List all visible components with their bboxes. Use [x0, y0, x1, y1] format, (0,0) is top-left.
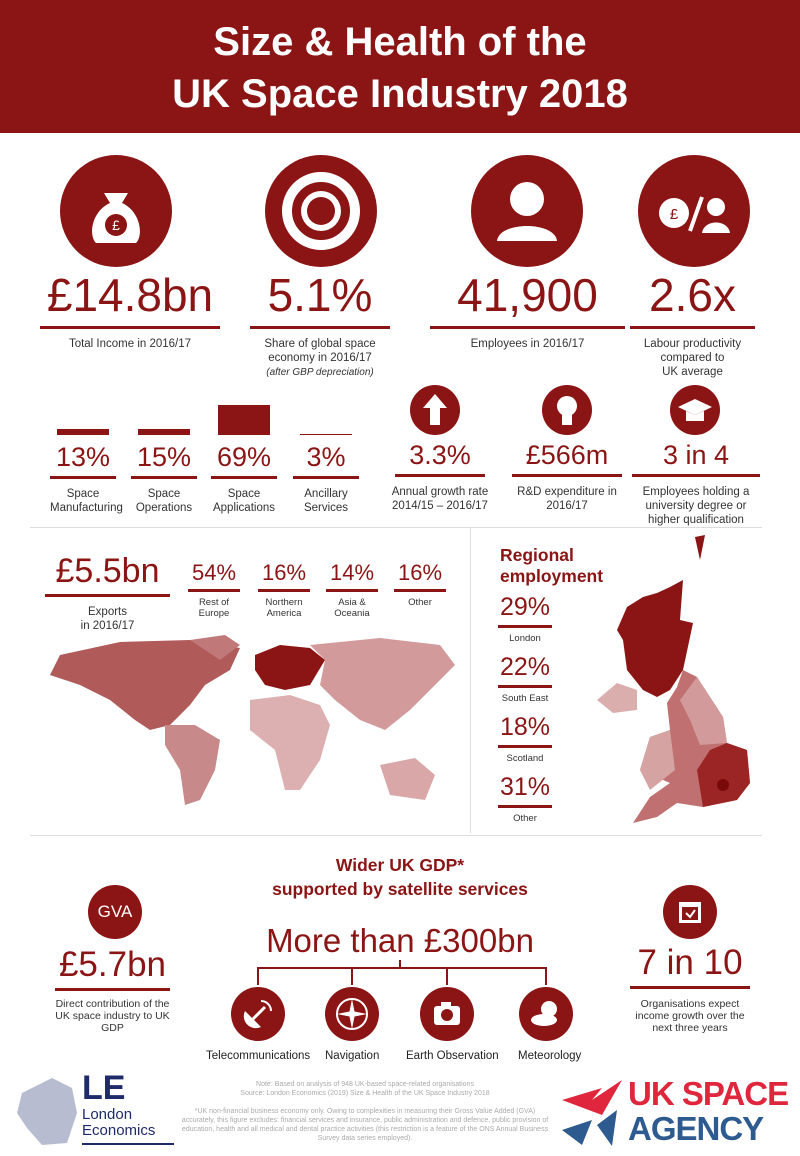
icon: compass: [325, 987, 379, 1041]
stat: total income: £14.8bn: [47, 269, 213, 321]
stat: GVA: [55, 945, 170, 1034]
logo: London Economics: London: [82, 1106, 132, 1123]
icon: weather: [519, 987, 573, 1041]
logo: UK Space Agency: AGENCY: [628, 1110, 763, 1147]
bar chart: segments: 15%: [137, 442, 191, 472]
stat: GVA: £5.7bn: [59, 945, 166, 984]
icon: up arrow: [410, 385, 460, 435]
stat: exports: £5.5bn: [56, 552, 160, 590]
stat: 7 in 10: [630, 943, 750, 1034]
icon: mortarboard: [670, 385, 720, 435]
bar chart: segments: 13%: [56, 442, 110, 472]
stat: exports: in 2016/17: [81, 620, 134, 632]
logo: London Economics: LE: [82, 1069, 125, 1107]
regional stats: Other: [513, 813, 537, 824]
icon: GVA: GVA: [98, 902, 132, 921]
stat: R&D: £566m: [526, 440, 608, 470]
icon: money bag: [60, 155, 172, 267]
stat: degree: [632, 440, 760, 526]
stat: 7 in 10: 7 in 10: [637, 943, 743, 982]
stat: degree: 3 in 4: [663, 440, 729, 470]
stat: share: [250, 269, 390, 378]
bar chart: segments: [50, 405, 359, 514]
regional stats: 18%: [500, 713, 550, 741]
stat: employees: 41,900: [457, 269, 598, 321]
bar chart: segments: Space Applications: [213, 488, 275, 514]
header banner: UK Space Industry 2018: [172, 72, 628, 116]
heading: regional employment: employment: [500, 566, 603, 586]
logo: London Economics: [17, 1069, 174, 1145]
labels: satellite services: Earth Observation: [406, 1050, 499, 1062]
stat: total income: Total Income in 2016/17: [69, 338, 191, 350]
stat: productivity: 2.6x: [649, 269, 736, 321]
regional stats: 29%: [500, 593, 550, 621]
export destinations: 16%: [398, 560, 442, 585]
stat: growth: Annual growth rate: [392, 486, 488, 498]
footnote: [182, 1080, 548, 1142]
export destinations: Other: [408, 597, 432, 608]
export destinations: 14%: [330, 560, 374, 585]
regional stats: 31%: [500, 773, 550, 801]
regional stats: Scotland: [506, 753, 543, 764]
stat: exports: Exports: [88, 606, 127, 618]
header banner: [0, 0, 800, 133]
icon: bulb: [542, 385, 592, 435]
export destinations: 54%: [192, 560, 236, 585]
stat: share: Share of global space economy in 2016/17: [264, 338, 376, 364]
logo: UK Space Agency: [562, 1075, 788, 1147]
bar chart: segments: Space Manufacturing: [50, 488, 123, 514]
logo: London Economics: Economics: [82, 1122, 155, 1139]
icon: calendar: [663, 885, 717, 939]
labels: satellite services: Telecommunications: [206, 1050, 310, 1062]
export destinations: 16%: [262, 560, 306, 585]
icon: money bag: £: [112, 217, 120, 233]
stat: productivity: UK average: [662, 366, 723, 378]
stat: R&D: R&D expenditure in 2016/17: [517, 486, 617, 512]
bar chart: segments: Space Operations: [136, 488, 192, 514]
stat: exports: [45, 552, 170, 632]
bar chart: segments: Ancillary Services: [304, 488, 348, 514]
heading: wider GDP: Wider UK GDP*: [336, 855, 464, 875]
footnote: *UK non-financial business economy only. Owing to complexities in measuring their Gross Value Added (GVA) accurately, this figure excludes: financial services and insurance, public administration and defence, public provision of education, health and all medical and dental practice activities (this restriction is a feature of the ONS Annual Business Survey data series employed).: [182, 1108, 548, 1142]
icon: donut: [265, 155, 377, 267]
labels: satellite services: [206, 1050, 582, 1062]
heading: wider GDP: [272, 855, 528, 899]
labels: satellite services: Navigation: [325, 1050, 379, 1062]
stat: degree: Employees holding a university degree or higher qualification: [643, 486, 749, 526]
stat: productivity: Labour productivity compared to: [644, 338, 741, 364]
icon: money per person: [638, 155, 750, 267]
stat: productivity: [630, 269, 755, 378]
icon: money per person: £: [670, 206, 679, 223]
header banner: Size & Health of the: [213, 20, 587, 64]
export destinations: Asia & Oceania: [334, 597, 370, 619]
logo: UK Space Agency: UK SPACE: [628, 1075, 788, 1112]
stat: share: 5.1%: [268, 269, 372, 321]
stat: 300bn: More than £300bn: [266, 922, 534, 959]
bar chart: segments: 69%: [217, 442, 271, 472]
footnote: Source: London Economics (2019) Size & Health of the UK Space Industry 2018: [240, 1090, 490, 1097]
stat: growth: 3.3%: [409, 440, 471, 470]
stat: R&D: [512, 440, 622, 512]
heading: wider GDP: supported by satellite services: [272, 879, 528, 899]
icon: camera: [420, 987, 474, 1041]
icon: GVA: [88, 885, 142, 939]
stat: employees: Employees in 2016/17: [471, 338, 584, 350]
stat: GVA: Direct contribution of the UK space industry to UK GDP: [55, 998, 170, 1034]
regional stats: London: [509, 633, 541, 644]
heading: regional employment: Regional: [500, 545, 574, 565]
bar chart: segments: 3%: [306, 442, 346, 472]
icon: satellite dish: [231, 987, 285, 1041]
heading: regional employment: [500, 545, 603, 586]
icon: person: [471, 155, 583, 267]
stat: share: (after GBP depreciation): [266, 367, 374, 378]
regional stats: South East: [502, 693, 548, 704]
world map: [50, 635, 455, 805]
regional stats: 22%: [500, 653, 550, 681]
footnote: Note: Based on analysis of 948 UK-based space-related organisations: [256, 1081, 474, 1088]
labels: satellite services: Meteorology: [518, 1050, 581, 1062]
stat: 7 in 10: Organisations expect income growth over the next three years: [635, 998, 745, 1034]
export destinations: [188, 560, 446, 619]
stat: growth: 2014/15 – 2016/17: [392, 500, 488, 512]
stat: growth: [392, 440, 488, 512]
stat: total income: [40, 269, 220, 350]
stat: employees: [430, 269, 625, 350]
export destinations: Rest of Europe: [199, 597, 229, 619]
regional stats: [498, 593, 552, 824]
export destinations: Northern America: [266, 597, 302, 619]
